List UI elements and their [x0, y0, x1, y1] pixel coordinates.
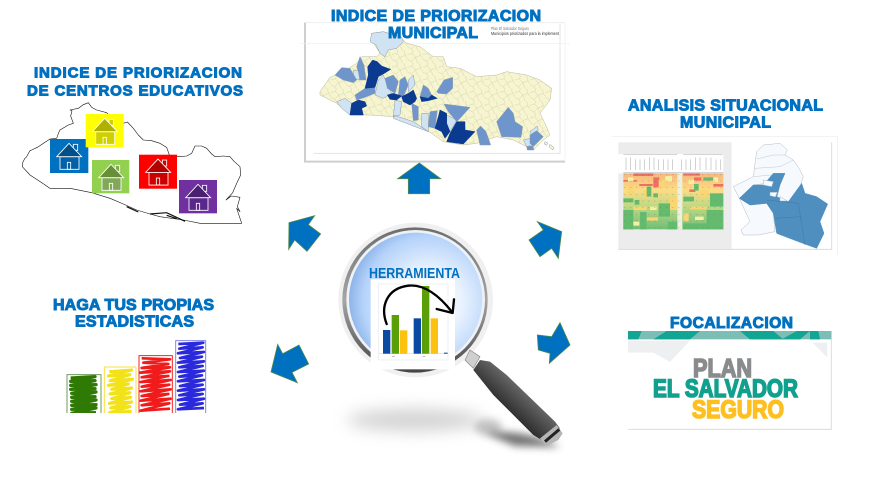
arrow: to estadisticas — [271, 344, 309, 383]
heading: ESTADISTICAS — [75, 314, 194, 330]
panel: analisis situacional municipal — [612, 98, 837, 255]
logo wordmark: PLAN — [693, 353, 752, 383]
plan el salvador seguro banner — [628, 331, 831, 429]
icon: blue house — [50, 139, 88, 173]
heading: MUNICIPAL — [680, 114, 771, 132]
heading — [27, 64, 243, 100]
country outline — [22, 103, 242, 223]
arrow: to centros educativos — [289, 216, 321, 251]
icon: yellow house — [86, 114, 124, 147]
curved arrow — [384, 286, 454, 324]
heading: ANALISIS SITUACIONAL — [628, 98, 823, 114]
heading: INDICE DE PRIORIZACION — [34, 64, 242, 82]
magnifying glass — [338, 223, 563, 447]
map frame — [300, 23, 570, 162]
image frame — [612, 136, 837, 255]
heading: INDICE DE PRIORIZACION — [331, 8, 541, 25]
logo wordmark: SEGURO — [692, 396, 784, 424]
heading — [331, 8, 541, 42]
shadow — [347, 409, 560, 447]
heading — [53, 297, 214, 330]
arrow: to focalizacion — [537, 323, 570, 363]
logo wordmark — [653, 353, 798, 424]
arrow: to municipal map — [398, 163, 441, 194]
municipal map — [733, 143, 828, 248]
chart card — [371, 279, 455, 369]
map legend box — [488, 26, 560, 37]
heading: MUNICIPAL — [388, 25, 478, 42]
panel: haga tus propias estadisticas — [53, 297, 214, 418]
map legend box: Plan El Salvador Seguro — [491, 26, 530, 31]
heatmap table — [618, 154, 723, 229]
panel: indice de priorizacion municipal — [300, 8, 570, 162]
arrow: to analisis situacional — [529, 222, 562, 258]
map legend box: Municipios priorizados para la implement — [491, 31, 560, 36]
heading: FOCALIZACION — [670, 315, 793, 332]
icon: purple house — [179, 180, 217, 213]
icon: green house — [92, 160, 129, 193]
label: herramienta: HERRAMIENTA — [369, 266, 460, 282]
lens and rim — [338, 223, 493, 377]
scribbled bar chart — [67, 341, 206, 418]
heading — [628, 98, 823, 132]
choropleth map of municipalities — [320, 32, 554, 150]
heading: DE CENTROS EDUCATIVOS — [27, 82, 243, 100]
handle — [465, 350, 563, 446]
logo wordmark: EL SALVADOR — [653, 375, 798, 403]
icon: red house — [139, 155, 177, 189]
panel: indice de priorizacion de centros educativos — [22, 64, 243, 223]
panel: focalizacion — [628, 315, 831, 429]
heading: HAGA TUS PROPIAS — [53, 297, 214, 314]
